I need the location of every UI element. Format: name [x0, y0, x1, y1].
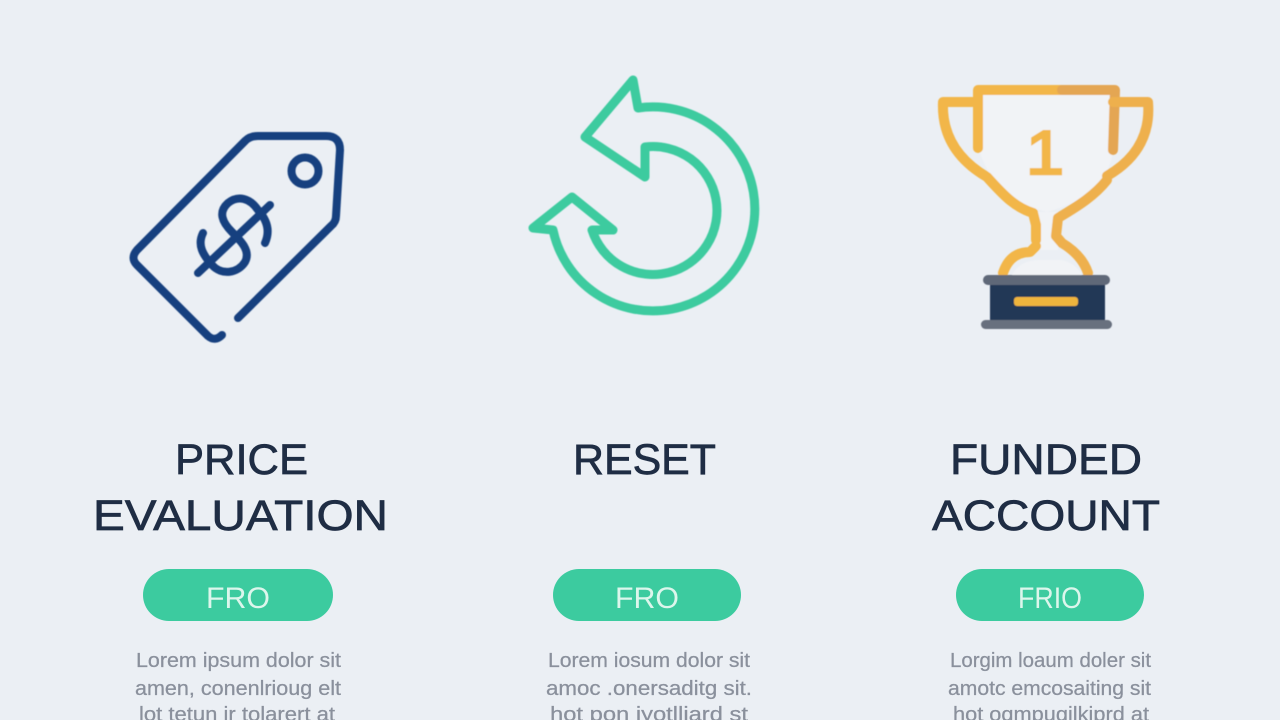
- heading: price evaluation: [93, 436, 388, 540]
- badge: FRO: [143, 569, 333, 621]
- heading: price evaluation: EVALUATION: [93, 492, 388, 540]
- base: [990, 282, 1105, 320]
- text block: description: amotc emcosaiting sit: [948, 678, 1151, 700]
- panel: funded account: [932, 90, 1160, 720]
- badge: FRO: FRO: [206, 582, 270, 615]
- text block: description: amoc .onersaditg sit.: [546, 678, 752, 700]
- badge: FRO: [553, 569, 741, 621]
- text block: description: [948, 650, 1151, 720]
- numeral 1: 1: [1026, 119, 1064, 188]
- heading: price evaluation: PRICE: [175, 436, 308, 484]
- heading: funded account: ACCOUNT: [932, 492, 1160, 540]
- foot highlight: [1012, 260, 1082, 275]
- cup fill: [979, 90, 1113, 212]
- icon: price tag with dollar sign: [134, 136, 340, 339]
- panel: reset: [533, 80, 755, 720]
- stem fill: [1036, 212, 1058, 250]
- panel: price evaluation: [93, 136, 388, 720]
- badge: FRIO: [956, 569, 1144, 621]
- text block: description: Lorem iosum dolor sit: [548, 650, 750, 672]
- icon: trophy: [943, 90, 1148, 329]
- heading: reset: RESET: [573, 436, 716, 484]
- cup outline and handles: [943, 90, 1148, 273]
- text block: description: [546, 650, 752, 720]
- heading: funded account: FUNDED: [950, 436, 1142, 484]
- text block: description: Lorgim loaum doler sit: [950, 650, 1151, 672]
- text block: description: amen, conenlrioug elt: [135, 678, 341, 700]
- text block: description: Lorem ipsum dolor sit: [136, 650, 341, 672]
- badge: FRO: FRO: [615, 582, 679, 615]
- heading: funded account: [932, 436, 1160, 540]
- badge: FRIO: FRIO: [1018, 582, 1082, 615]
- text block: description: [135, 650, 341, 720]
- icon: circular reset arrow: [533, 80, 755, 311]
